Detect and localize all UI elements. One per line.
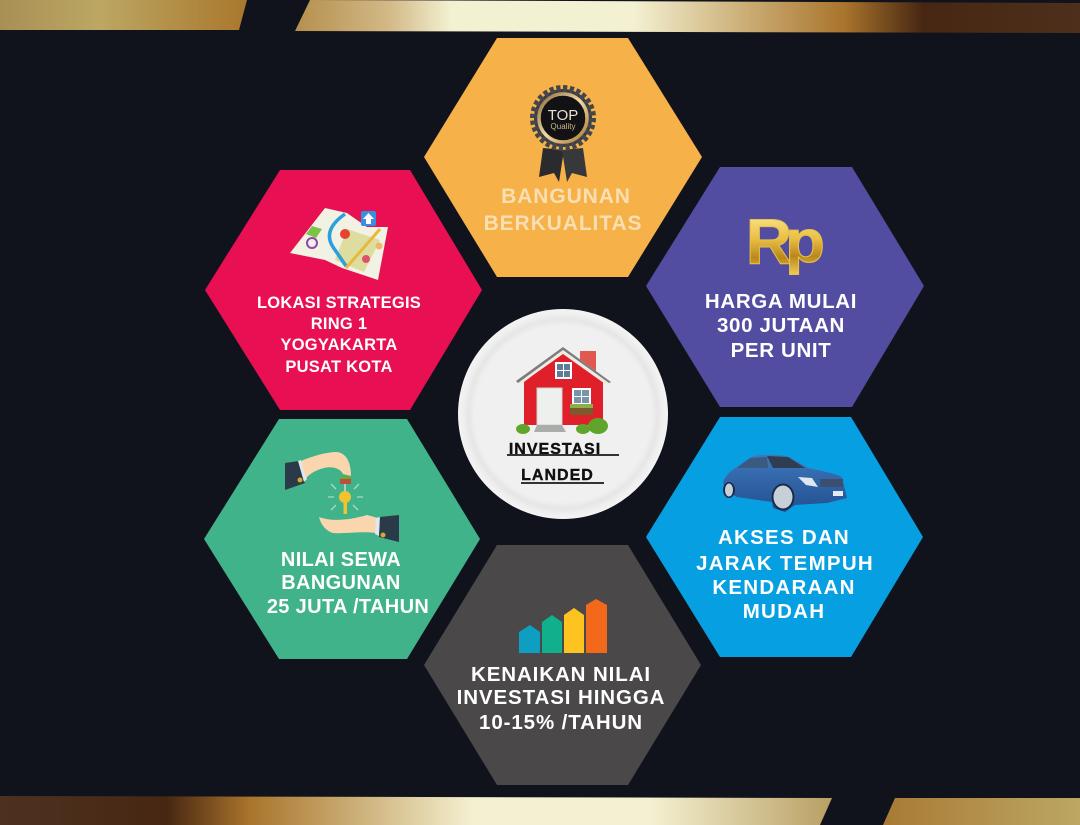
panel: kenaikan nilai investasi (424, 545, 701, 785)
label: lokasi strategis: PUSAT KOTA (285, 358, 393, 376)
panel: akses dan jarak tempuh (646, 417, 923, 657)
icon: top quality badge: Quality (551, 122, 575, 131)
bottom gold bar right (883, 798, 1080, 825)
label: investasi: INVESTASI (509, 441, 601, 458)
icon: top quality badge: TOP (548, 107, 578, 124)
label: nilai sewa: 25 JUTA /TAHUN (267, 596, 429, 618)
panel: center circle (458, 309, 668, 519)
icon: hands and key (285, 452, 399, 542)
label: lokasi strategis: YOGYAKARTA (280, 336, 398, 354)
label: akses dan jarak tempuh: AKSES DAN (718, 526, 850, 549)
label: lokasi strategis: LOKASI STRATEGIS (257, 294, 421, 312)
label: akses dan jarak tempuh: MUDAH (743, 600, 825, 623)
label: kenaikan nilai investasi: INVESTASI HINGGA (457, 686, 665, 709)
icon: map (290, 208, 388, 280)
panel: lokasi strategis (205, 170, 482, 410)
top gold bar left (0, 0, 247, 30)
label: lokasi strategis: RING 1 (311, 315, 367, 333)
label: landed: LANDED (521, 467, 594, 484)
icon: rupiah (746, 206, 825, 278)
icon: red house (516, 347, 611, 434)
bottom gold bar left (0, 796, 832, 825)
icon: rupiah: p (785, 208, 825, 275)
top gold bar right (295, 0, 1080, 33)
icon: growth bars (519, 599, 607, 653)
icon: car (723, 455, 847, 512)
icon: rupiah: R (746, 206, 792, 278)
label: bangunan berkualitas: BERKUALITAS (484, 212, 642, 235)
icon: top quality badge (534, 89, 592, 182)
label: bangunan berkualitas: BANGUNAN (501, 185, 631, 208)
panel: nilai sewa (204, 419, 480, 659)
label: akses dan jarak tempuh: KENDARAAN (712, 576, 856, 599)
panel: bangunan berkualitas (424, 38, 702, 277)
label: kenaikan nilai investasi: KENAIKAN NILAI (471, 663, 651, 686)
label: harga mulai: PER UNIT (731, 339, 831, 362)
label: harga mulai: 300 JUTAAN (717, 314, 845, 337)
label: nilai sewa: NILAI SEWA (281, 549, 401, 571)
panel: harga mulai (646, 167, 924, 407)
label: kenaikan nilai investasi: 10-15% /TAHUN (479, 711, 643, 734)
label: harga mulai: HARGA MULAI (705, 290, 857, 313)
label: akses dan jarak tempuh: JARAK TEMPUH (696, 552, 874, 575)
label: nilai sewa: BANGUNAN (281, 572, 401, 594)
